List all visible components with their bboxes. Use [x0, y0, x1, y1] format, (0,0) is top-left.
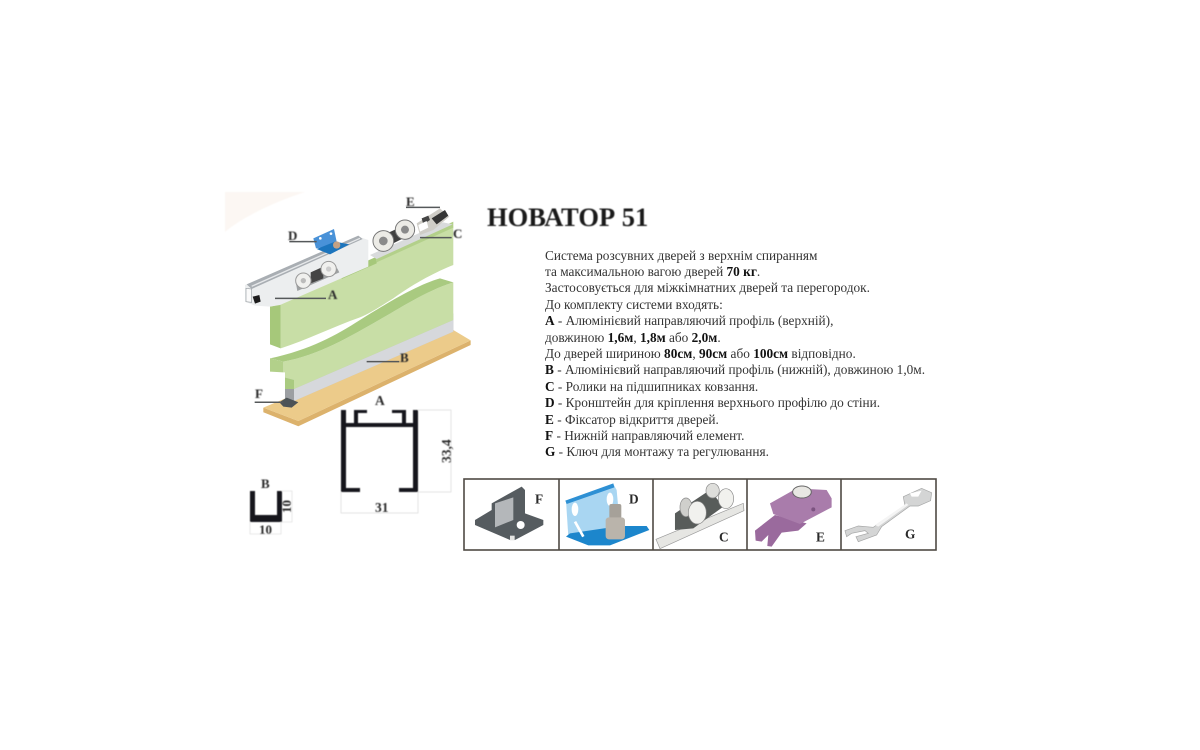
- dimensions of profile A: [341, 410, 454, 515]
- part E: door stopper: E: [816, 530, 825, 545]
- door stopper E: [417, 208, 449, 235]
- top aluminium profile A: [245, 236, 368, 307]
- illustration: sliding door assembly: [245, 207, 471, 426]
- dimensions of profile A: 33,4: [439, 439, 454, 463]
- leader lines: [255, 207, 452, 402]
- description text: Система розсувних дверей з верхнім спиранням: [545, 248, 817, 262]
- callout: F: F: [255, 386, 263, 401]
- roller carriage C: [370, 220, 453, 259]
- title: НОВАТОР 51: [487, 202, 648, 232]
- dimensions of profile A: 31: [375, 500, 389, 515]
- part E: door stopper: [755, 486, 832, 547]
- description text: F - Нижній направляючий елемент.: [545, 428, 744, 443]
- description text: B - Алюмінієвий направляючий профіль (нижній), довжиною 1,0м.: [545, 362, 925, 377]
- bracket D: [313, 229, 349, 254]
- description text: та максимальною вагою дверей 70 кг.: [545, 264, 760, 279]
- description text: E - Фіксатор відкриття дверей.: [545, 412, 719, 427]
- roller carriage in profile: [296, 261, 339, 291]
- part G: wrench: G: [905, 526, 915, 541]
- background swoosh: [225, 192, 305, 232]
- description text: [545, 248, 925, 459]
- description text: довжиною 1,6м, 1,8м або 2,0м.: [545, 330, 721, 345]
- description text: G - Ключ для монтажу та регулювання.: [545, 444, 769, 459]
- profile B section: [250, 476, 294, 537]
- callout: E: E: [406, 194, 415, 209]
- dimensions of profile B: 10: [259, 522, 272, 537]
- dimensions of profile B: 10: [279, 500, 294, 513]
- door lower part: [270, 278, 453, 389]
- description text: До дверей шириною 80см, 90см або 100см відповідно.: [545, 346, 856, 361]
- part D: wall bracket: [565, 483, 649, 545]
- part G: wrench: [845, 488, 932, 542]
- label: A: A: [375, 393, 385, 408]
- part C: roller carriage: [656, 483, 744, 549]
- description text: C - Ролики на підшипниках ковзання.: [545, 379, 758, 394]
- profile A section: [341, 393, 454, 515]
- label: B: B: [261, 476, 270, 491]
- part C: roller carriage: C: [719, 530, 729, 545]
- callout: C: C: [453, 226, 462, 241]
- callout: B: B: [400, 350, 409, 365]
- lower guide profile B: [285, 313, 453, 401]
- dimensions of profile B: [250, 491, 294, 537]
- floor guide F: [279, 389, 298, 408]
- door upper part: [270, 222, 453, 348]
- callout letters: [255, 194, 462, 401]
- part D: wall bracket: D: [629, 491, 639, 506]
- description text: До комплекту системи входять:: [545, 297, 723, 312]
- description text: D - Кронштейн для кріплення верхнього профілю до стіни.: [545, 395, 880, 410]
- parts strip: [464, 479, 936, 550]
- description text: A - Алюмінієвий направляючий профіль (верхній),: [545, 313, 833, 328]
- part F: floor guide: [475, 487, 543, 540]
- description text: Застосовується для міжкімнатних дверей та перегородок.: [545, 280, 870, 295]
- part F: floor guide: F: [535, 491, 543, 506]
- wooden floor board: [263, 329, 471, 426]
- callout: D: D: [288, 228, 297, 243]
- callout: A: A: [328, 287, 338, 302]
